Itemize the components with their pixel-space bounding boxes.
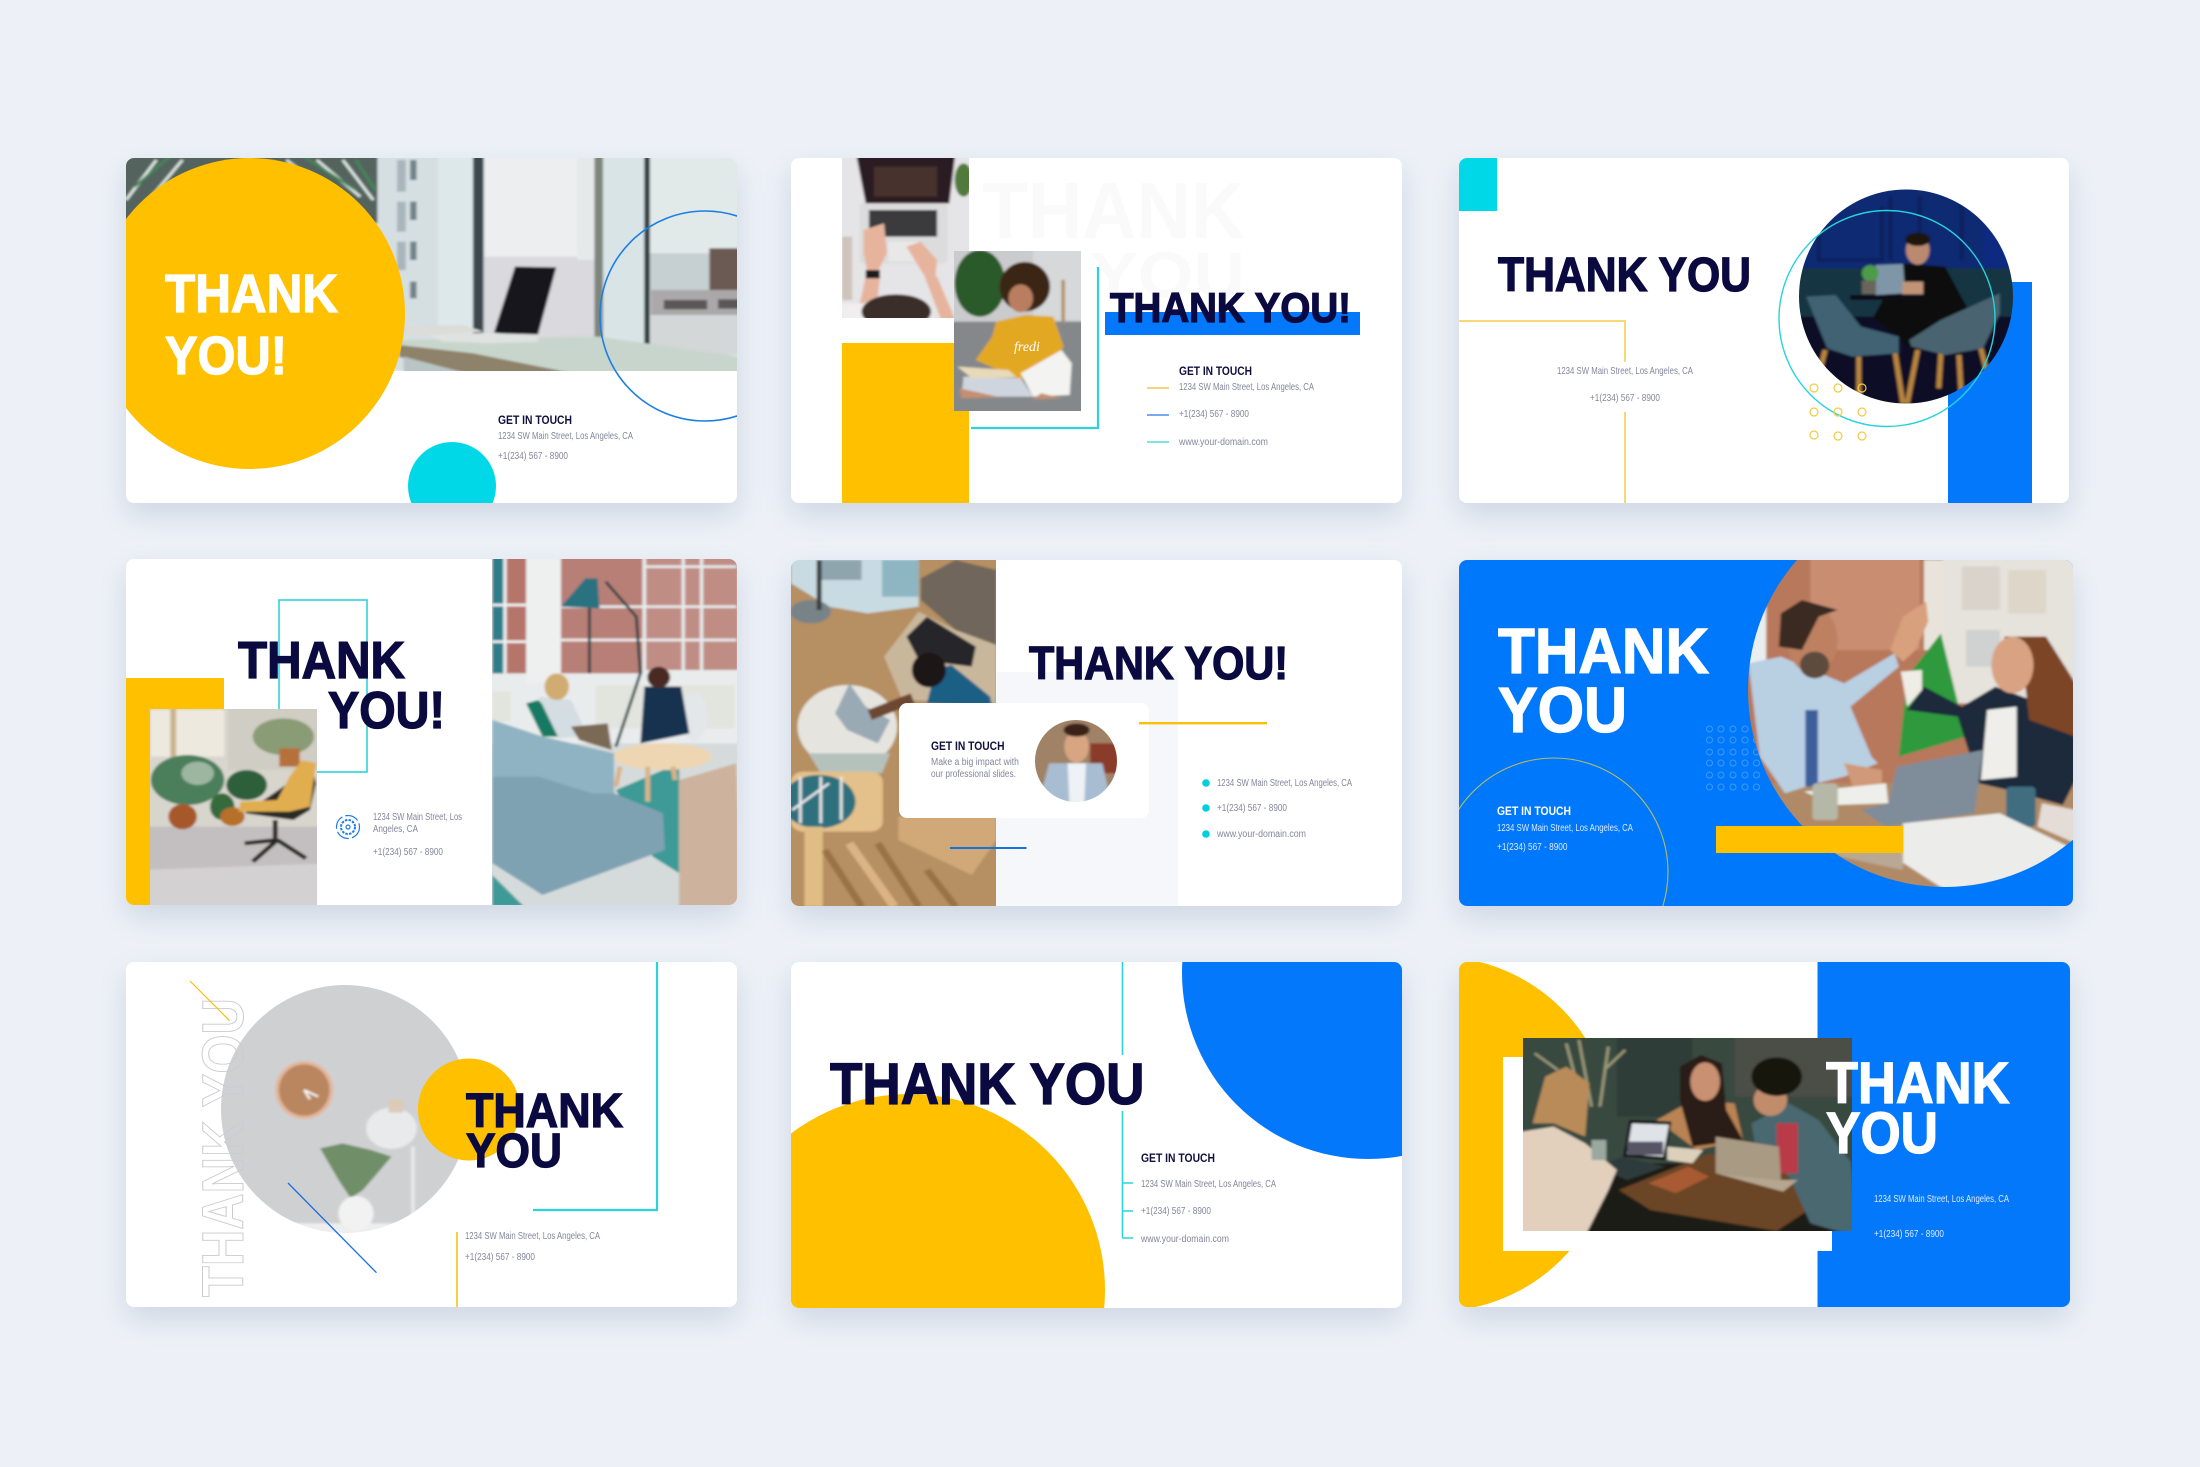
contact text: +1(234) 567 - 8900	[465, 1252, 535, 1263]
contact list: www.your-domain.com	[1140, 1234, 1229, 1245]
contact text	[373, 812, 462, 858]
line: blue diagonal	[288, 1183, 376, 1273]
photo: two colleagues high five	[1748, 560, 2073, 887]
photo: wall clock lamp and plant	[208, 977, 477, 1240]
contact text: 1234 SW Main Street, Los	[373, 812, 462, 823]
photo: plants and yellow chair	[150, 709, 317, 905]
contact list: +1(234) 567 - 8900	[1141, 1206, 1211, 1217]
contact text	[1874, 1194, 2009, 1240]
panel: slide 5 overhead photo	[780, 550, 1402, 913]
panel: slide 9 team photo	[1258, 956, 2070, 1312]
contact text	[465, 1231, 600, 1263]
title: THANK	[238, 632, 405, 690]
photo: lounge with sofa	[492, 559, 737, 905]
line: thin arc	[1459, 758, 1669, 906]
slide overview grid	[117, 158, 2082, 1329]
contact text: +1(234) 567 - 8900	[498, 451, 568, 462]
shape: yellow rectangle	[842, 343, 969, 503]
title	[238, 632, 445, 740]
contact text: GET IN TOUCH	[1497, 804, 1571, 818]
text: card copy: our professional slides.	[931, 769, 1016, 780]
title	[466, 1085, 623, 1178]
contact text: 1234 SW Main Street, Los Angeles, CA	[1497, 823, 1633, 834]
contact text: GET IN TOUCH	[498, 413, 572, 427]
panel: slide 1 yellow circle	[117, 158, 746, 524]
ghost heading: THANK	[982, 166, 1245, 255]
title: THANK YOU!	[1029, 637, 1288, 689]
title: YOU!	[328, 682, 445, 740]
panel: slide 3 circular photo	[1459, 158, 2069, 503]
contact list: GET IN TOUCH	[1179, 364, 1252, 378]
title: THANK YOU	[1498, 249, 1751, 302]
contact list: GET IN TOUCH	[1141, 1151, 1215, 1165]
shape: blue bar	[1105, 312, 1360, 335]
contact text: 1234 SW Main Street, Los Angeles, CA	[465, 1231, 600, 1242]
dots: yellow rings	[1810, 384, 1866, 440]
text: card copy: Make a big impact with	[931, 757, 1019, 768]
shape: white frame	[1503, 1057, 1832, 1251]
title	[1826, 1051, 2010, 1166]
dots: ring matrix	[1706, 726, 1760, 790]
photo: smiling man portrait	[1035, 720, 1117, 802]
title: THANK	[165, 264, 338, 324]
shape: yellow circle	[1258, 956, 1614, 1312]
sweater lettering: fredi	[1014, 340, 1040, 355]
line: teal connector with ticks	[1122, 962, 1133, 1238]
line: yellow vertical	[456, 1232, 458, 1307]
shape: yellow circle	[418, 1058, 520, 1160]
shape: yellow circle	[713, 1094, 1105, 1467]
panel: slide 4 lounge photo	[126, 550, 742, 913]
shape: teal outline rectangle	[279, 600, 367, 772]
contact list	[1147, 364, 1314, 448]
contact text	[498, 413, 633, 462]
card: get in touch	[899, 703, 1149, 818]
contact text: Angeles, CA	[373, 824, 418, 835]
line: yellow frame	[1459, 321, 1625, 503]
photo: overhead person with laptop	[791, 560, 996, 906]
shape: blue panel	[1818, 962, 2070, 1307]
title: THANK YOU!	[1110, 284, 1351, 331]
photo: friends at cafe table	[1512, 1030, 1861, 1240]
panel: slide 6 blue high five	[1450, 560, 2082, 927]
line: yellow diagonal	[190, 981, 230, 1021]
title: YOU	[1498, 674, 1627, 746]
icon: gear with circular arrows	[336, 816, 360, 838]
contact text: 1234 SW Main Street, Los Angeles, CA	[1557, 366, 1693, 377]
contact text	[1497, 804, 1633, 853]
contact list: 1234 SW Main Street, Los Angeles, CA	[1179, 382, 1314, 393]
shape: cyan circle	[408, 442, 496, 503]
contact list: www.your-domain.com	[1216, 829, 1306, 840]
contact text: +1(234) 567 - 8900	[1590, 393, 1660, 404]
panel: slide 2 two photos	[791, 147, 1402, 503]
shape: yellow bar	[1716, 826, 1903, 853]
outline vertical text: THANK YOU	[191, 998, 256, 1297]
contact list: +1(234) 567 - 8900	[1179, 409, 1249, 420]
contact text: +1(234) 567 - 8900	[373, 847, 443, 858]
shape: cyan ring	[1779, 210, 1995, 426]
photo: office window with laptop	[126, 158, 737, 371]
contact text: 1234 SW Main Street, Los Angeles, CA	[1874, 1194, 2009, 1205]
text: card copy	[931, 739, 1019, 780]
title: THANK	[1826, 1051, 2010, 1116]
contact list	[1140, 1151, 1276, 1245]
text: card copy: GET IN TOUCH	[931, 739, 1004, 753]
contact list: 1234 SW Main Street, Los Angeles, CA	[1217, 778, 1352, 789]
line: blue accent	[950, 847, 1026, 849]
contact list: 1234 SW Main Street, Los Angeles, CA	[1141, 1179, 1276, 1190]
title: THANK	[466, 1085, 623, 1138]
line: yellow accent	[1139, 722, 1267, 724]
panel: slide 7 clock photo	[126, 962, 737, 1307]
panel: slide 8 big circles	[713, 787, 1554, 1467]
shape: yellow corner	[126, 678, 224, 905]
contact text: +1(234) 567 - 8900	[1874, 1229, 1944, 1240]
shape: yellow circle	[126, 158, 405, 469]
title: YOU	[1826, 1101, 1938, 1166]
photo: hands on laptop	[842, 158, 969, 318]
title: YOU!	[165, 326, 287, 386]
shape: light panel	[996, 672, 1178, 906]
ghost heading: YOU	[1090, 239, 1245, 311]
photo: man at blue wall	[1799, 190, 2013, 404]
contact list: www.your-domain.com	[1178, 437, 1268, 448]
contact text	[1557, 366, 1693, 404]
title	[165, 264, 338, 386]
line: teal corner	[971, 267, 1098, 428]
contact list	[1202, 778, 1352, 840]
title: THANK	[1498, 615, 1709, 687]
title: YOU	[466, 1125, 562, 1178]
contact text: 1234 SW Main Street, Los Angeles, CA	[498, 431, 633, 442]
contact text: +1(234) 567 - 8900	[1497, 842, 1568, 853]
shape: blue rectangle	[1948, 282, 2032, 503]
ghost heading	[982, 166, 1245, 311]
photo: woman in yellow sweater	[954, 251, 1081, 411]
shape: blue ring	[599, 210, 737, 422]
contact list: +1(234) 567 - 8900	[1217, 803, 1287, 814]
shape: blue circle	[1182, 787, 1554, 1159]
title: THANK YOU	[830, 1052, 1144, 1117]
title	[1498, 615, 1709, 746]
line: teal corner	[533, 962, 657, 1210]
shape: cyan square	[1459, 158, 1497, 211]
